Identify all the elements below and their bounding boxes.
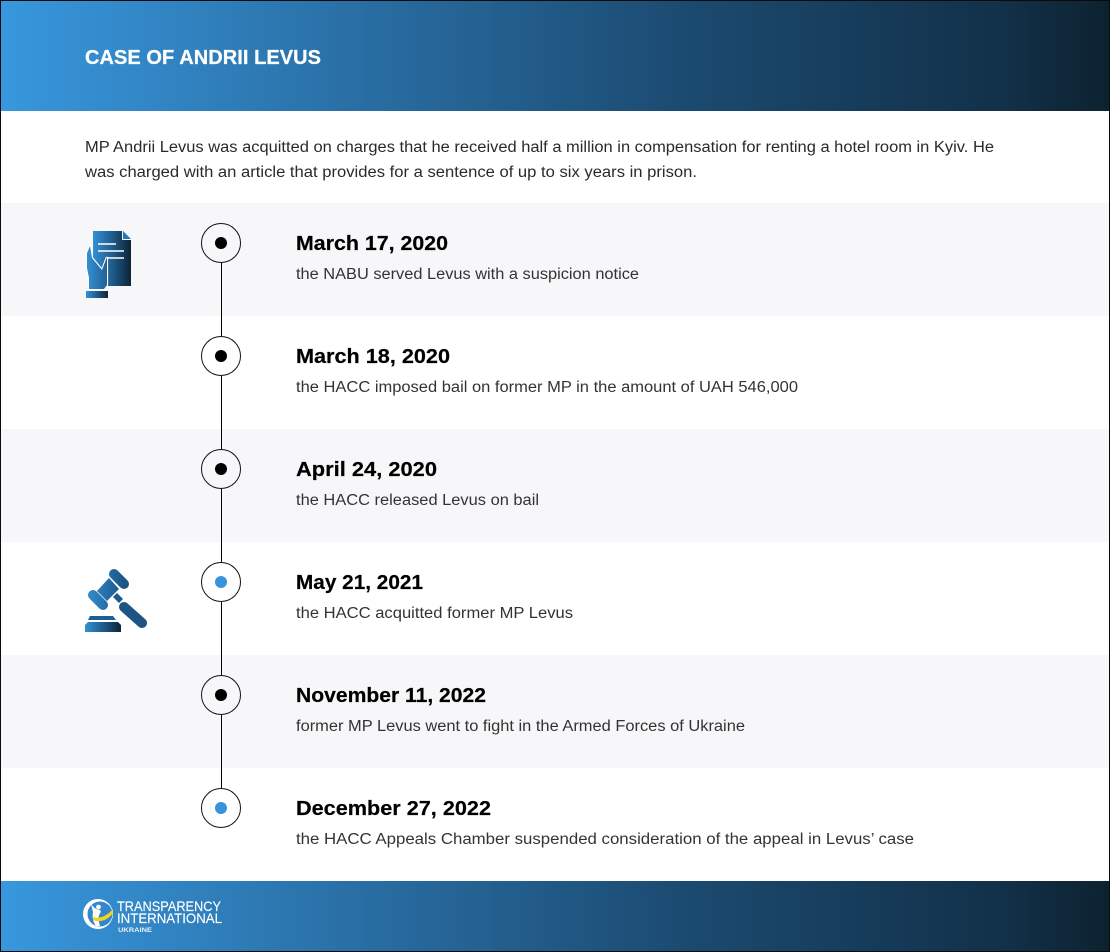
logo: UKRAINE: [118, 927, 153, 934]
intro text: [84, 139, 994, 181]
timeline event 3: [202, 450, 539, 509]
timeline event 1: [202, 224, 639, 283]
timeline event 5: former MP Levus went to fight in the Armed Forces of Ukraine: [296, 718, 745, 735]
logo: [83, 898, 222, 934]
timeline event 4: the HACC acquitted former MP Levus: [296, 605, 573, 622]
row background 1: [1, 203, 1109, 316]
intro text: was charged with an article that provides for a sentence of up to six years in prison.: [84, 164, 697, 181]
footer band: [1, 881, 1109, 951]
timeline event 6: December 27, 2022: [296, 798, 491, 820]
row background 3: [1, 429, 1109, 542]
timeline line: [221, 243, 222, 800]
timeline event 5: November 11, 2022: [296, 685, 486, 707]
timeline event 4: [202, 562, 573, 622]
timeline event 6: the HACC Appeals Chamber suspended consideration of the appeal in Levus’ case: [296, 831, 914, 848]
logo: INTERNATIONAL: [117, 910, 222, 926]
timeline event 1: the NABU served Levus with a suspicion notice: [296, 266, 639, 283]
timeline event 1: March 17, 2020: [296, 233, 448, 255]
title: CASE OF ANDRII LEVUS: [85, 47, 321, 69]
icon: gavel: [85, 574, 142, 632]
timeline event 2: [202, 336, 798, 396]
timeline event 5: [202, 676, 745, 735]
icon: document in hand: [86, 231, 131, 298]
header band: [1, 1, 1109, 111]
intro text: MP Andrii Levus was acquitted on charges that he received half a million in compensation for renting a hotel room in Kyiv. He: [85, 139, 994, 156]
row background 5: [1, 655, 1109, 768]
timeline event 2: the HACC imposed bail on former MP in the amount of UAH 546,000: [296, 379, 798, 396]
timeline event 4: May 21, 2021: [296, 572, 423, 594]
timeline event 2: March 18, 2020: [296, 346, 450, 368]
timeline event 3: April 24, 2020: [296, 459, 437, 481]
timeline event 6: [202, 788, 914, 848]
timeline event 3: the HACC released Levus on bail: [296, 492, 539, 509]
logo: TRANSPARENCY: [117, 898, 222, 914]
